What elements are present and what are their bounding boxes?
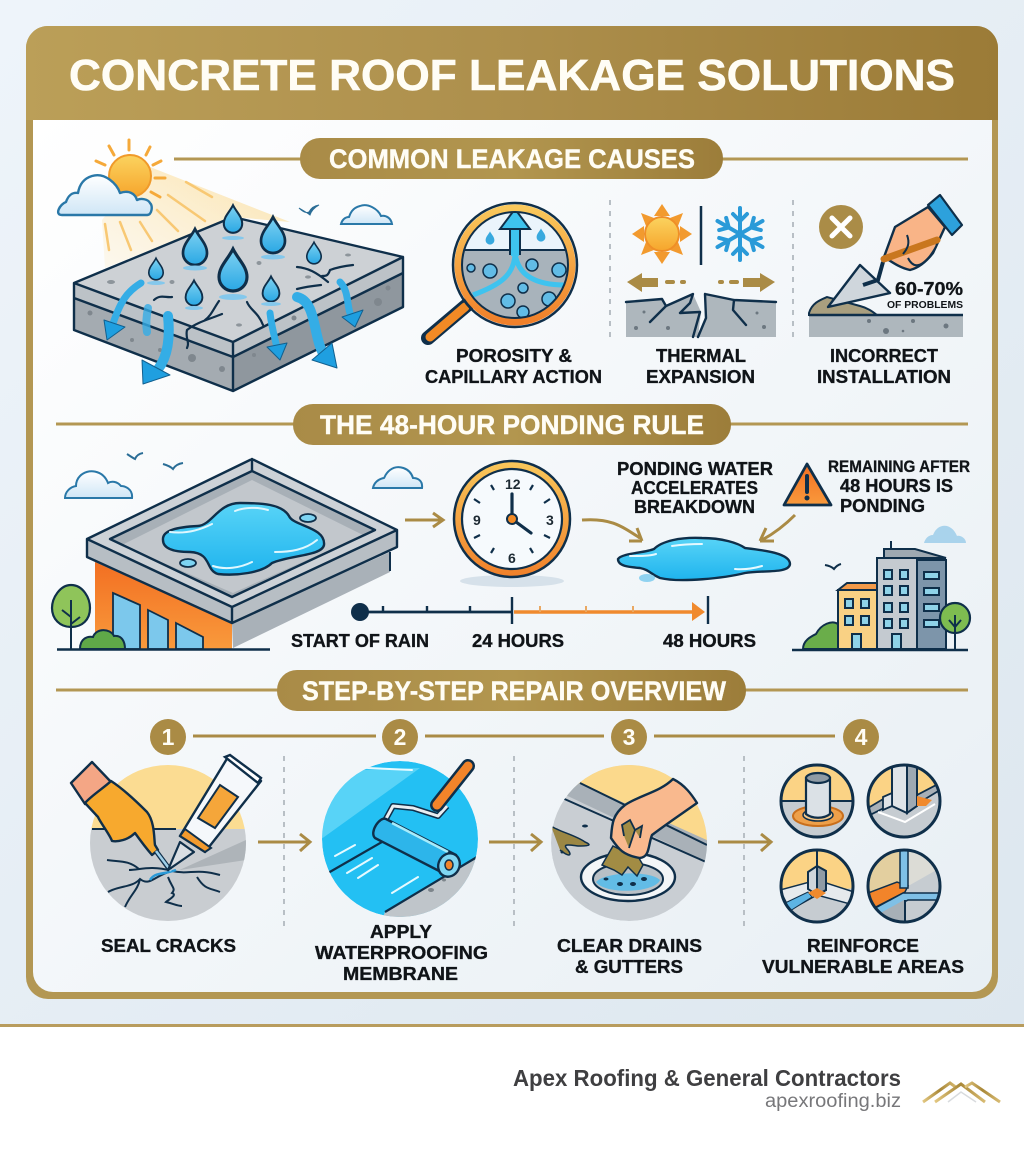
- icon: clock: [454, 461, 570, 587]
- label: thermal expansion: [646, 345, 755, 387]
- text: ponding water accelerates breakdown: PONDING WATER: [617, 458, 773, 479]
- illustration: puddle: [618, 538, 790, 582]
- section: common leakage causes: [58, 138, 968, 391]
- icon: incorrect installation: [809, 195, 963, 337]
- detail: inside corner: [780, 850, 854, 922]
- text: remaining after 48 hours is ponding: 48 HOURS IS: [840, 475, 953, 496]
- arrows between steps: [258, 834, 771, 851]
- footer company name: Apex Roofing & General Contractors: [513, 1065, 901, 1091]
- text: remaining after 48 hours is ponding: [828, 458, 970, 516]
- step number badges: 2: [394, 724, 406, 750]
- detail: chimney base: [868, 765, 940, 837]
- heading: step-by-step repair overview: STEP-BY-STEP REPAIR OVERVIEW: [302, 676, 726, 706]
- label: incorrect installation: [817, 345, 951, 387]
- step number badges: 3: [623, 724, 635, 750]
- icon: clock: 12: [505, 476, 521, 492]
- footer: [0, 1024, 1024, 1154]
- step 2: apply waterproofing membrane: WATERPROOFING: [315, 942, 488, 963]
- icon: clock: 9: [473, 512, 481, 528]
- illustration: city buildings: [792, 526, 970, 650]
- title: CONCRETE ROOF LEAKAGE SOLUTIONS: [69, 51, 955, 100]
- step 4: reinforce vulnerable areas: [762, 765, 964, 977]
- illustration: leaking concrete slab: [74, 205, 403, 391]
- label: porosity and capillary action: [425, 345, 602, 387]
- label: incorrect installation: INCORRECT: [830, 345, 939, 366]
- step 3: clear drains and gutters: [551, 765, 707, 974]
- illustration: flat roof with ponding water: [52, 453, 422, 650]
- text: ponding water accelerates breakdown: [617, 458, 773, 517]
- text: ponding water accelerates breakdown: ACCELERATES: [631, 477, 758, 498]
- icon: thermal expansion: [626, 204, 776, 337]
- icon: incorrect installation: 60-70%: [895, 279, 963, 299]
- heading: the 48-hour ponding rule: [56, 404, 968, 445]
- label: thermal expansion: EXPANSION: [646, 366, 755, 387]
- timeline: 24 HOURS: [472, 630, 564, 651]
- step 1: seal cracks: [71, 755, 261, 956]
- step 4: reinforce vulnerable areas: REINFORCE: [807, 935, 919, 956]
- detail: pipe flashing: [780, 765, 854, 837]
- heading: common leakage causes: COMMON LEAKAGE CAUSES: [329, 144, 695, 174]
- label: porosity and capillary action: POROSITY &: [456, 345, 572, 366]
- timeline: 48 HOURS: [663, 630, 756, 651]
- arrow: clock to puddle: [582, 520, 642, 541]
- water drops: [149, 205, 321, 306]
- text: remaining after 48 hours is ponding: PONDING: [840, 495, 925, 516]
- text: remaining after 48 hours is ponding: REMAINING AFTER: [828, 458, 970, 476]
- step 2: apply waterproofing membrane: [315, 761, 488, 984]
- tree: [52, 585, 125, 649]
- dividers: [284, 756, 744, 932]
- icon: warning triangle: [784, 464, 831, 505]
- footer logo: [923, 1083, 1000, 1102]
- divider: [610, 200, 793, 338]
- detail: wall junction: [868, 850, 940, 925]
- timeline: [291, 596, 756, 651]
- step 3: clear drains and gutters: & GUTTERS: [575, 956, 683, 977]
- arrow: warning to puddle: [760, 515, 795, 541]
- step 3: clear drains and gutters: CLEAR DRAINS: [557, 935, 702, 956]
- arrow: roof to clock: [405, 513, 443, 527]
- icon: magnifying glass: [428, 203, 577, 338]
- label: incorrect installation: INSTALLATION: [817, 366, 951, 387]
- heading: common leakage causes: [174, 138, 968, 179]
- step 4: reinforce vulnerable areas: VULNERABLE AREAS: [762, 956, 964, 977]
- label: thermal expansion: THERMAL: [656, 345, 746, 366]
- icon: clock: 6: [508, 550, 516, 566]
- cracks: [154, 265, 353, 348]
- icon: incorrect installation: OF PROBLEMS: [887, 299, 963, 311]
- icon: clock: 3: [546, 512, 554, 528]
- section: the 48-hour ponding rule: [52, 404, 970, 651]
- label: porosity and capillary action: CAPILLARY ACTION: [425, 366, 602, 387]
- section: step-by-step repair overview: [56, 670, 968, 984]
- seepage arrows: [111, 282, 352, 377]
- step number badges: 4: [855, 724, 868, 750]
- step 1: seal cracks: SEAL CRACKS: [101, 935, 236, 956]
- heading: the 48-hour ponding rule: THE 48-HOUR PONDING RULE: [320, 410, 704, 440]
- clouds and birds: [65, 453, 422, 498]
- step number badges: 1: [162, 724, 175, 750]
- heading: step-by-step repair overview: [56, 670, 968, 711]
- timeline: START OF RAIN: [291, 630, 429, 651]
- step 2: apply waterproofing membrane: MEMBRANE: [343, 963, 458, 984]
- icon: sun and cloud: [58, 140, 392, 268]
- text: ponding water accelerates breakdown: BREAKDOWN: [634, 496, 755, 517]
- footer url: apexroofing.biz: [765, 1091, 901, 1112]
- step number badges: [150, 719, 879, 755]
- step 2: apply waterproofing membrane: APPLY: [370, 921, 433, 942]
